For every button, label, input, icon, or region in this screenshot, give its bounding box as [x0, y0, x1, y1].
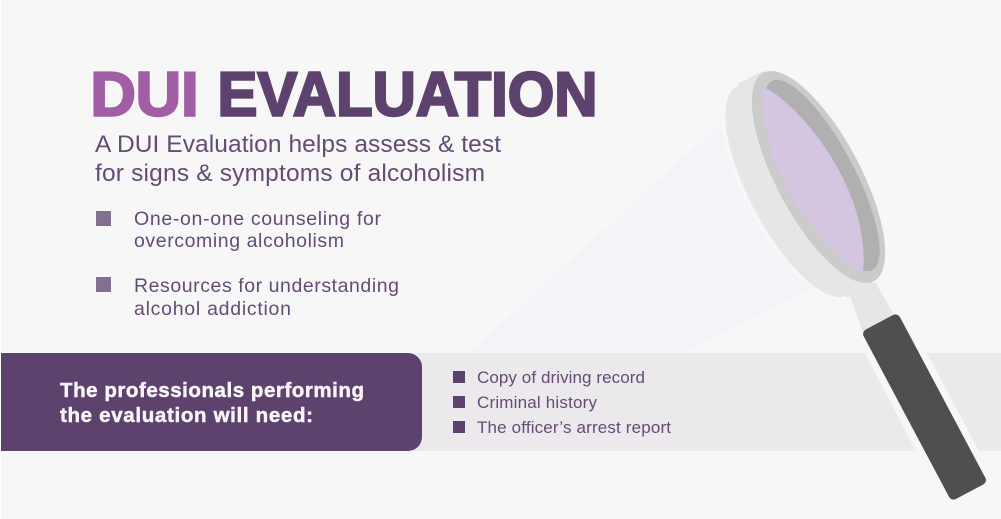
- subtitle: for signs & symptoms of alcoholism: [95, 160, 485, 187]
- list item: criminal history: Criminal history: [477, 393, 598, 412]
- lens rim side: [700, 67, 884, 315]
- bullet: counseling: [96, 208, 387, 252]
- handle gap across band: [865, 353, 979, 451]
- shaft: [849, 282, 895, 333]
- lens halo: [700, 67, 884, 315]
- bullet: resources: Resources for understanding: [134, 275, 399, 297]
- list item: arrest report: The officer’s arrest report: [477, 418, 671, 437]
- bullet: resources: [96, 275, 405, 320]
- inner shadow ring: [744, 66, 900, 285]
- bullet: counseling: One-on-one counseling for: [134, 208, 382, 230]
- requirements list: [453, 368, 671, 437]
- title word: DUI: DUI: [90, 60, 198, 130]
- glass lens: [763, 87, 864, 272]
- outer ring: [726, 53, 911, 301]
- list item: driving record: Copy of driving record: [477, 368, 645, 387]
- panel heading text: The professionals performing: [60, 379, 364, 402]
- title: [90, 60, 598, 130]
- dark handle: [861, 313, 988, 501]
- light beam from magnifier: [470, 122, 811, 352]
- panel heading text: the evaluation will need:: [60, 404, 313, 427]
- panel: dark heading block: [1, 353, 422, 451]
- title word: EVALUATION: EVALUATION: [218, 60, 598, 130]
- subtitle: A DUI Evaluation helps assess & test: [95, 131, 501, 158]
- bullet: resources: alcohol addiction: [134, 298, 291, 320]
- bullet: counseling: overcoming alcoholism: [134, 230, 344, 252]
- panel: light background band: [400, 353, 1001, 451]
- icon: magnifying glass: [700, 53, 988, 501]
